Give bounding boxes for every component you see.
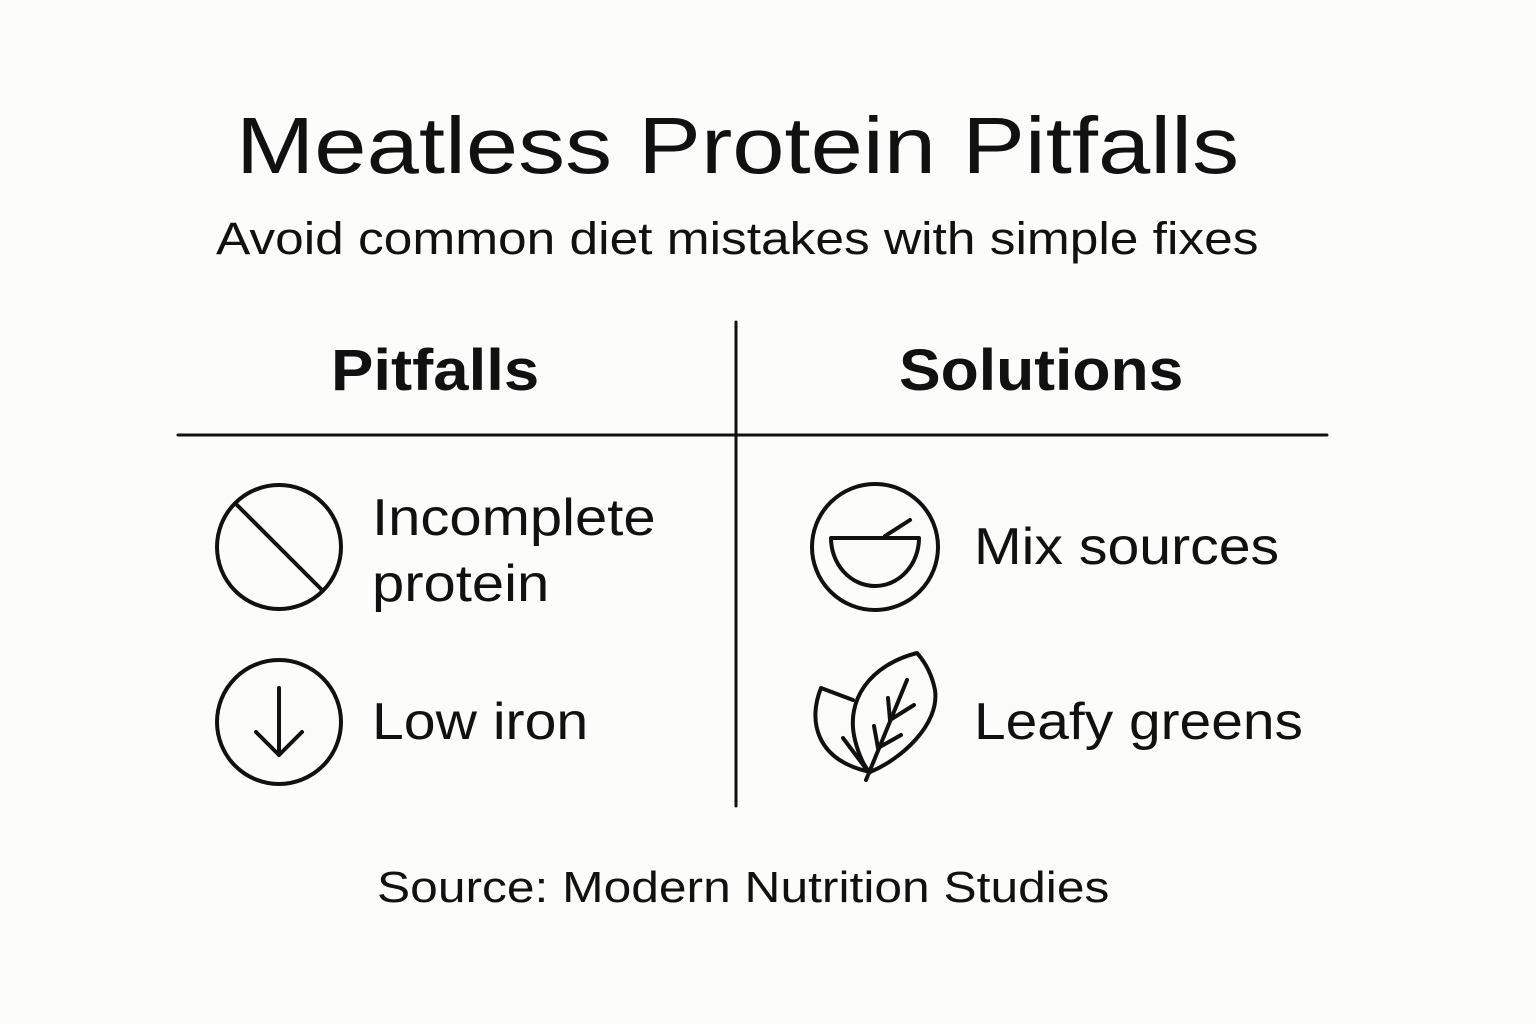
item: leafy greens: Leafy greens [974,693,1303,751]
item: mix sources: Mix sources [974,518,1279,576]
icon: down arrow [217,660,341,784]
icon: leaf [815,653,935,780]
title: Meatless Protein Pitfalls [236,101,1239,190]
item: incomplete protein [372,489,656,613]
subtitle: Avoid common diet mistakes with simple fixes [216,213,1258,264]
heading: pitfalls: Pitfalls [331,338,539,403]
icon: prohibited [217,485,341,609]
icon: bowl [812,484,938,610]
item: incomplete protein: protein [372,555,549,613]
item: low iron: Low iron [372,693,588,751]
source: Source: Modern Nutrition Studies [377,863,1109,912]
heading: solutions: Solutions [899,338,1183,403]
item: incomplete protein: Incomplete [372,489,656,547]
